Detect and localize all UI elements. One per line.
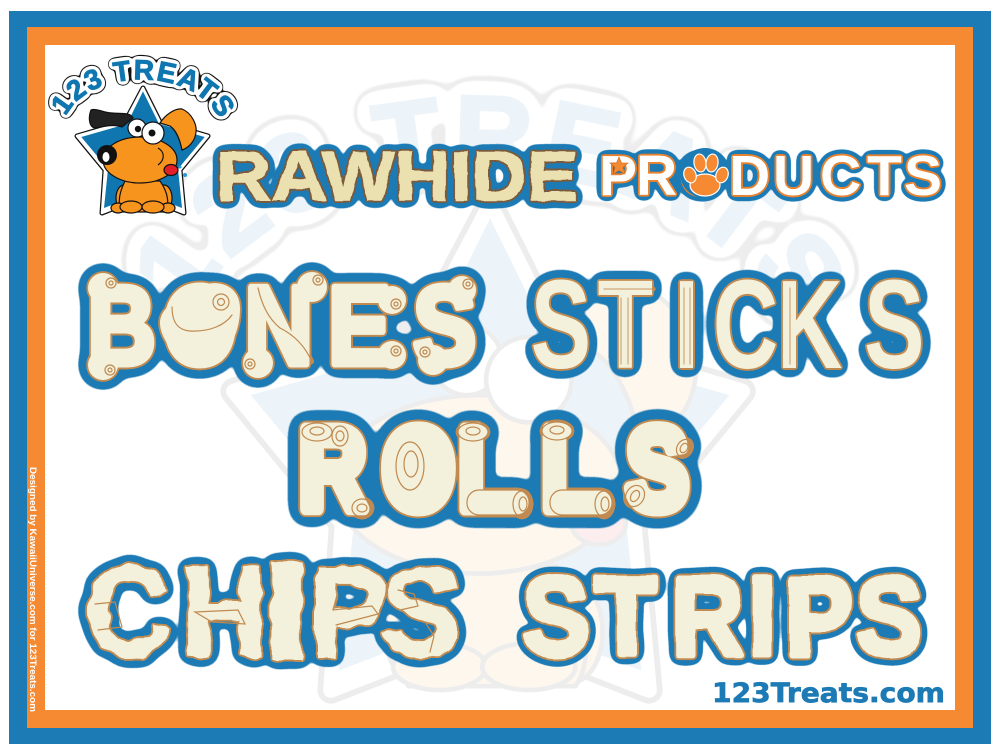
word: STICKS: STICKS <box>531 256 925 396</box>
word: CHIPS: C <box>86 542 171 684</box>
word: STRIPS: STRIPS <box>523 555 922 679</box>
icon: paw <box>680 148 730 198</box>
word: BONES: BONES <box>88 264 476 388</box>
watermark: faint enlarged logo: 123 TREATS <box>122 76 859 326</box>
logo dog <box>89 109 196 213</box>
logo arc text: 123 TREATS <box>48 54 238 121</box>
products text: PRODUCTS <box>599 144 942 208</box>
heading: RAWHIDE: RAWHIDE <box>216 137 578 215</box>
credit text vertical: Designed by KawaiiUniverse.com for 123Treats.com <box>28 467 38 712</box>
word: CHIPS <box>86 542 461 684</box>
word: CHIPS: I <box>270 542 303 684</box>
bone knobs <box>88 272 476 380</box>
icon: orange star <box>610 157 628 174</box>
word: CHIPS: S <box>382 542 461 684</box>
watermark: faint enlarged logo <box>122 76 859 704</box>
website url: 123Treats.com <box>712 678 945 709</box>
chip crack lines <box>95 590 434 652</box>
logo: 123 Treats dog on star <box>48 54 238 216</box>
log ends and spirals <box>302 422 695 517</box>
word: CHIPS: P <box>310 542 388 684</box>
heading: PRODUCTS with paw <box>599 144 942 208</box>
word: ROLLS: ROLLS <box>299 405 688 534</box>
bone spirals <box>105 275 473 375</box>
word: CHIPS: H <box>182 542 267 684</box>
logo star <box>77 88 208 213</box>
stick grain lines <box>604 288 790 364</box>
